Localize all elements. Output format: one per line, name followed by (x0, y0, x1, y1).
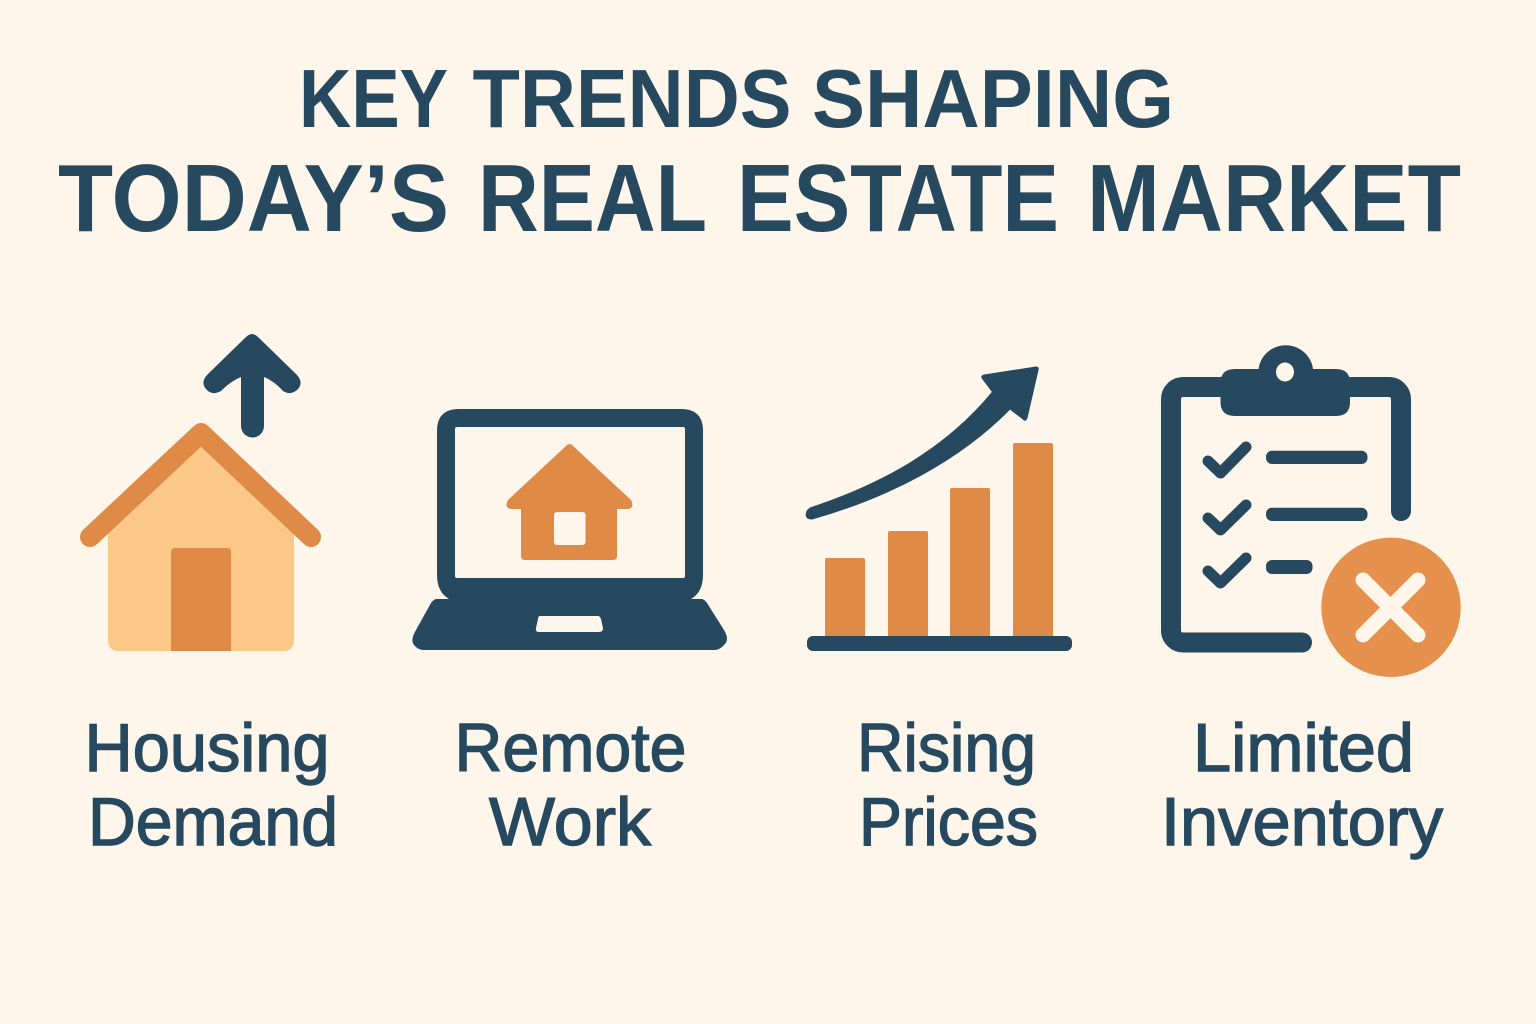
label: Limited Inventory: Inventory (1161, 784, 1443, 860)
title: TRENDS (472, 52, 792, 145)
label: Housing Demand: Housing (84, 710, 330, 786)
label: Remote Work: Remote (454, 710, 686, 786)
title: REAL (478, 145, 707, 252)
title: TODAY’S (58, 145, 449, 252)
label: Limited Inventory (1161, 710, 1443, 860)
icon: clipboard with checklist and x badge (1171, 345, 1461, 677)
label: Rising Prices: Prices (859, 784, 1038, 860)
label: Housing Demand: Demand (88, 784, 338, 860)
label: Rising Prices (857, 710, 1038, 860)
title: ESTATE (737, 145, 1059, 252)
label: Limited Inventory: Limited (1193, 710, 1414, 786)
label: Remote Work (454, 710, 686, 860)
icon: rising bar chart (806, 367, 1072, 651)
title: SHAPING (812, 52, 1174, 145)
label: Rising Prices: Rising (857, 710, 1036, 786)
title: MARKET (1087, 145, 1461, 252)
label: Remote Work: Work (489, 784, 652, 860)
icon: house with up arrow (90, 334, 311, 651)
icon: laptop with house (412, 409, 727, 650)
title (58, 52, 1461, 252)
label: Housing Demand (84, 710, 338, 860)
title: KEY (299, 52, 448, 145)
